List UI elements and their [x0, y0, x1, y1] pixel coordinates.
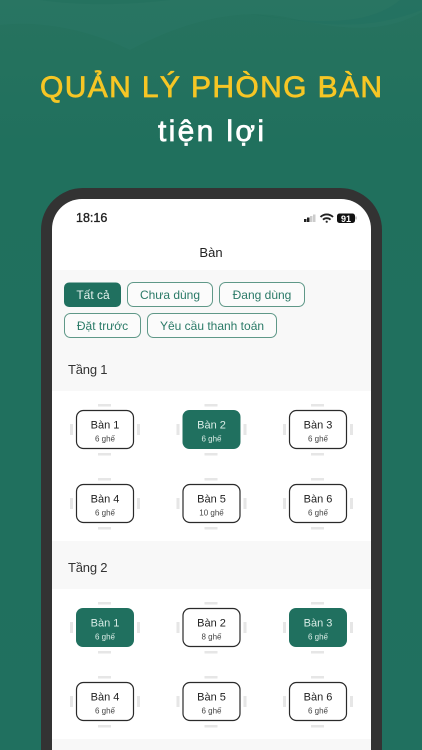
table: Bàn 2 — [176, 404, 246, 456]
status bar — [76, 211, 356, 225]
table: Bàn 3: Bàn 3 — [304, 618, 332, 630]
chip: Đang dùng — [220, 282, 304, 306]
table: Bàn 5: 10 ghế — [199, 508, 224, 518]
chip: Yêu cầu thanh toán: Yêu cầu thanh toán — [160, 319, 264, 333]
table: Bàn 3 — [283, 404, 353, 456]
table: Bàn 1 — [70, 404, 140, 456]
table: Bàn 6: 6 ghế — [308, 706, 329, 716]
chip: Chưa dùng — [128, 282, 212, 306]
table: Bàn 1 — [70, 602, 140, 654]
table: Bàn 1: 6 ghế — [95, 434, 116, 444]
chip: Yêu cầu thanh toán — [148, 314, 276, 338]
table: Bàn 1: Bàn 1 — [91, 618, 119, 630]
table: Bàn 5: Bàn 5 — [197, 494, 226, 506]
table: Bàn 4: 6 ghế — [95, 508, 116, 518]
table: Bàn 3: 6 ghế — [308, 434, 329, 444]
table: Bàn 3: 6 ghế — [308, 632, 329, 642]
screen header: Bàn — [199, 245, 223, 260]
table: Bàn 4 — [70, 676, 140, 728]
icon: battery — [337, 214, 356, 224]
table: Bàn 2: 6 ghế — [201, 434, 222, 444]
title: tiện lợi — [158, 115, 264, 148]
floor 2 tables — [70, 602, 353, 728]
phone screen — [52, 199, 371, 750]
chip: Đặt trước: Đặt trước — [77, 319, 128, 333]
table: Bàn 6 — [283, 478, 353, 530]
title — [40, 70, 382, 148]
chip: Tất cả — [64, 282, 121, 307]
title: QUẢN LÝ PHÒNG BÀN — [40, 70, 382, 104]
next floor header strip — [52, 739, 371, 750]
table: Bàn 4: 6 ghế — [95, 706, 116, 716]
table: Bàn 6: Bàn 6 — [304, 494, 332, 506]
table: Bàn 4: Bàn 4 — [91, 494, 119, 506]
table: Bàn 2 — [176, 602, 246, 654]
status bar: 18:16 — [76, 211, 107, 225]
table: Bàn 6 — [283, 676, 353, 728]
table: Bàn 6: 6 ghế — [308, 508, 329, 518]
table: Bàn 5 — [176, 478, 246, 530]
icon: battery: 91 — [341, 214, 351, 224]
floor 2 header: Tầng 2 — [68, 560, 108, 575]
table: Bàn 5: Bàn 5 — [197, 692, 226, 704]
table: Bàn 2: 8 ghế — [201, 632, 222, 642]
floor 1 tables — [70, 404, 353, 530]
table: Bàn 2: Bàn 2 — [197, 420, 226, 432]
table: Bàn 6: Bàn 6 — [304, 692, 332, 704]
table: Bàn 2: Bàn 2 — [197, 618, 226, 630]
table: Bàn 1: Bàn 1 — [91, 420, 119, 432]
icon: signal — [304, 214, 316, 222]
chip: Đặt trước — [64, 314, 140, 338]
heading: Tầng 1: Tầng 1 — [68, 362, 108, 377]
chip: Chưa dùng: Chưa dùng — [140, 288, 200, 302]
table: Bàn 4: Bàn 4 — [91, 692, 119, 704]
phone frame — [41, 188, 382, 750]
table: Bàn 4 — [70, 478, 140, 530]
table: Bàn 1: 6 ghế — [95, 632, 116, 642]
icon: wifi — [320, 214, 333, 223]
filter section — [52, 270, 371, 391]
table: Bàn 5: 6 ghế — [201, 706, 222, 716]
phone mockup — [41, 188, 382, 750]
chip: Tất cả: Tất cả — [76, 288, 110, 302]
table: Bàn 3: Bàn 3 — [304, 420, 332, 432]
table: Bàn 5 — [176, 676, 246, 728]
chip: Đang dùng: Đang dùng — [233, 288, 291, 302]
table: Bàn 3 — [283, 602, 353, 654]
floor 2 header — [52, 541, 371, 589]
